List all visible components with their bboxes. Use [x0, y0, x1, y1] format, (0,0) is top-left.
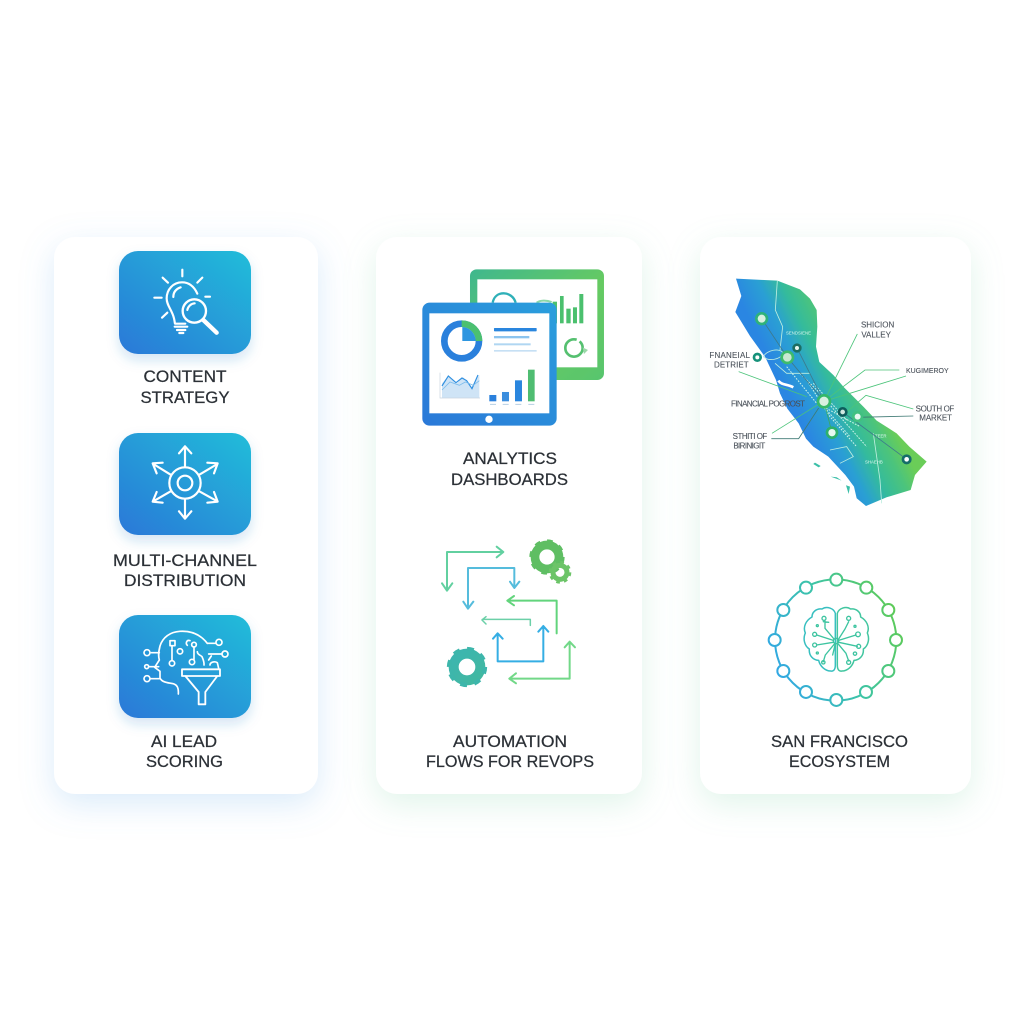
- map: location labels: SOUTH OF: [916, 404, 954, 413]
- heading: analytics dashboards: [451, 449, 568, 489]
- heading: San Francisco ecosystem: [771, 732, 908, 771]
- heading: San Francisco ecosystem: SAN FRANCISCO: [771, 732, 908, 751]
- heading: AI lead scoring: AI LEAD: [151, 732, 217, 751]
- gear: large green: [531, 541, 563, 573]
- heading: content strategy: CONTENT: [144, 367, 226, 386]
- bar chart: [489, 370, 535, 404]
- icon: automation flow arrows and gears: [442, 541, 575, 685]
- panel: centre services column: [376, 237, 642, 794]
- heading: AI lead scoring: SCORING: [146, 752, 223, 771]
- map: location labels: VALLEY: [861, 330, 892, 339]
- map: leader lines: [739, 319, 913, 459]
- map: location labels: [709, 320, 954, 450]
- heading: automation flows for revops: FLOWS FOR REVOPS: [426, 752, 594, 771]
- panel: left services column: [54, 237, 318, 794]
- map: location labels: FNANEIAL: [709, 351, 751, 360]
- map: small region labels: TEER: [875, 433, 887, 438]
- map: location labels: FINANCIAL POGROST: [731, 399, 805, 408]
- heading: multi-channel distribution: DISTRIBUTION: [124, 571, 246, 590]
- map: location labels: DETRIET: [714, 360, 749, 369]
- map: location labels: MARKET: [919, 414, 952, 423]
- map: small region labels: SHAEHB: [865, 459, 883, 464]
- heading: automation flows for revops: AUTOMATION: [453, 732, 567, 751]
- panel: right ecosystem column: [700, 237, 971, 794]
- line chart: [440, 373, 480, 398]
- map: location labels: KUGIMEROY: [906, 368, 949, 375]
- gear: small green: [550, 562, 570, 582]
- heading: analytics dashboards: DASHBOARDS: [451, 470, 568, 489]
- map: location labels: STHITI OF: [733, 432, 767, 441]
- heading: San Francisco ecosystem: ECOSYSTEM: [789, 752, 890, 771]
- gear: teal: [449, 649, 485, 685]
- back tablet with green frame: [470, 269, 604, 380]
- map: location labels: SHICION: [861, 320, 894, 329]
- heading: multi-channel distribution: MULTI-CHANNEL: [113, 551, 257, 570]
- icon: brain in a node ring: [769, 574, 902, 706]
- heading: automation flows for revops: [426, 732, 594, 771]
- heading: analytics dashboards: ANALYTICS: [463, 449, 557, 468]
- heading: AI lead scoring: [146, 732, 223, 771]
- map: small region labels: SENDSIENE: [786, 331, 811, 336]
- node ring: [769, 574, 902, 706]
- heading: multi-channel distribution: [113, 551, 257, 590]
- icon: analytics tablets: [422, 269, 604, 426]
- heading: content strategy: STRATEGY: [140, 388, 230, 407]
- heading: content strategy: [140, 367, 230, 407]
- map: California with labelled hubs: [709, 279, 954, 506]
- map: bay and internal boundaries: [763, 281, 882, 503]
- map: location pins: [754, 313, 910, 463]
- icon: hub with six outgoing arrows: [119, 433, 251, 535]
- front tablet with blue frame: [422, 303, 557, 426]
- legend lines: [494, 328, 537, 352]
- map: location labels: BIRINIGIT: [733, 441, 765, 450]
- icon: lightbulb with magnifier: [119, 251, 251, 354]
- map: small region labels: [786, 331, 887, 464]
- donut chart: [444, 324, 479, 358]
- map: islands: [813, 463, 850, 494]
- brain: [804, 608, 869, 671]
- map: state shape: [735, 279, 927, 506]
- icon: AI head with circuits and funnel: [119, 615, 251, 718]
